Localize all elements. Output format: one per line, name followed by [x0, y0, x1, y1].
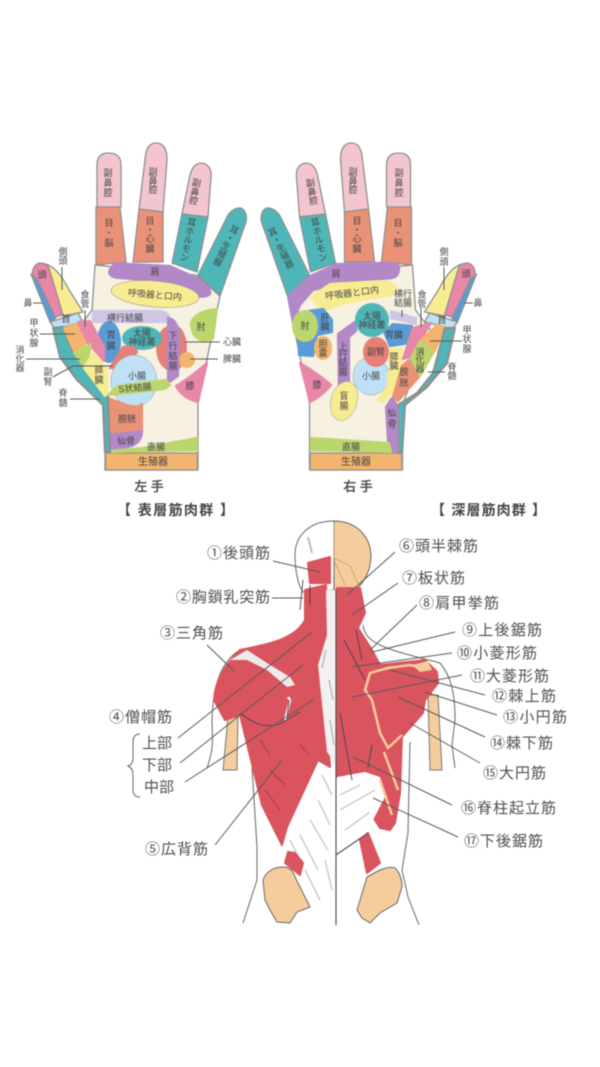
right hand labels: 心 [352, 233, 362, 244]
right hand labels: ・ [271, 234, 283, 247]
right hand labels: モ [315, 243, 326, 255]
right hand labels: 骨 [387, 419, 397, 429]
left hand labels: 神経叢 [128, 336, 156, 347]
left hand labels: 小腸 [128, 371, 146, 381]
left hand labels: 鼻 [190, 185, 200, 198]
right hand labels: 状 [462, 333, 472, 344]
left hand labels: 腺 [29, 337, 39, 348]
left hand labels: 生殖器 [138, 455, 168, 468]
right hand labels: 首 [437, 314, 447, 325]
right hand labels: 脳 [393, 237, 403, 248]
right hand labels: 生殖器 [341, 455, 371, 468]
left hand labels: 甲 [29, 318, 39, 328]
muscle labels: ⑫棘上筋 [492, 688, 556, 705]
trapezius brace [128, 734, 140, 797]
right hand labels: 右 手 [343, 479, 373, 494]
right hand labels: 脊 [447, 361, 457, 372]
right hand labels: 髄 [447, 370, 457, 381]
right hand labels: 頭 [461, 269, 471, 279]
right hand labels: 臓 [389, 361, 399, 371]
left hand labels: 目 [104, 218, 114, 228]
right hand labels: 盲 [339, 391, 349, 401]
right hand labels: 化 [415, 355, 425, 365]
heading: deep muscles: 【 深層筋肉群 】 [431, 502, 546, 518]
right hand labels: ・ [352, 225, 362, 235]
muscle leader lines [178, 552, 497, 845]
left hand labels: ン [179, 252, 190, 263]
right hand labels: 目 [393, 218, 403, 228]
left hand labels: 頭 [37, 270, 47, 280]
left hand labels: 腔 [148, 185, 158, 195]
left hand labels: 鼻 [148, 175, 158, 186]
left hand labels: 臓 [106, 341, 116, 351]
muscle labels: ④僧帽筋 [109, 709, 172, 726]
right hand labels: 目 [352, 216, 362, 226]
left hand labels: モ [181, 243, 192, 255]
muscle labels: ⑬小円筋 [503, 709, 567, 726]
left hand labels: 肩 [150, 267, 160, 277]
muscle labels: ⑭棘下筋 [490, 735, 553, 752]
right hand labels: 腔 [348, 185, 358, 195]
torso outline [243, 742, 419, 925]
back muscle anatomy illustration [207, 521, 455, 925]
left hand labels: 鼻 [103, 177, 113, 188]
left hand labels: 首 [61, 313, 71, 324]
deep muscles: right side [337, 588, 438, 923]
right hand labels: 胱 [399, 378, 409, 388]
left hand labels [15, 167, 241, 494]
right hand labels: 耳 [310, 217, 321, 228]
right hand labels: 直腸 [342, 441, 360, 452]
left hand labels: 器 [15, 363, 25, 373]
left hand labels: 呼吸器と口内 [128, 287, 182, 302]
right hand labels: 腺 [462, 343, 472, 354]
left hand labels: 肘 [196, 322, 206, 332]
left hand labels: ホ [184, 225, 195, 237]
right hand labels: 器 [415, 364, 425, 374]
right hand labels: 太陽 [363, 310, 381, 321]
muscle labels [109, 538, 567, 858]
right hand labels: 殖 [278, 249, 291, 263]
right hand labels: 鼻 [473, 297, 483, 308]
right hand labels: 横行 [394, 288, 412, 299]
right hand labels [267, 167, 483, 494]
left hand labels: 脾臓 [223, 353, 241, 364]
right hand labels: 腸 [338, 367, 348, 377]
left hand labels: 膀胱 [118, 414, 136, 424]
heading: superficial muscles: 【 表層筋肉群 】 [117, 502, 234, 518]
right hand labels: 側 [439, 246, 449, 257]
muscle labels: ②胸鎖乳突筋 [176, 589, 270, 606]
left hand labels: 食 [80, 290, 90, 300]
left hand labels: 下 [168, 331, 178, 341]
muscle labels: ⑪大菱形筋 [470, 668, 549, 685]
left hand labels: 耳 [228, 224, 240, 237]
muscle labels: ⑰下後鋸筋 [464, 833, 543, 850]
left hand labels: 鼻 [23, 297, 33, 308]
right hand labels: ン [317, 252, 328, 263]
muscle labels: ①後頭筋 [207, 545, 270, 562]
left hand leader lines [26, 267, 220, 399]
left hand labels: 心臓 [223, 336, 241, 347]
right hand labels: 甲 [462, 325, 472, 335]
right hand labels: 結腸 [394, 297, 412, 308]
muscle labels: ⑧肩甲挙筋 [419, 595, 499, 612]
left hand labels: 腔 [103, 188, 113, 198]
right hand labels: 膵 [389, 351, 399, 362]
right hand labels: 副 [348, 167, 358, 177]
left hand labels: 状 [29, 327, 39, 338]
right hand labels: 器 [283, 258, 296, 271]
left hand labels: 目 [145, 216, 155, 226]
right hand labels: ホ [312, 225, 323, 237]
left hand labels: 左 手 [134, 479, 164, 494]
left hand labels: 直腸 [147, 441, 165, 452]
left hand labels: ・ [145, 225, 155, 235]
right hand labels: 腔 [308, 195, 319, 207]
left hand labels: 髄 [58, 397, 68, 408]
right hand labels: 呼吸器と口内 [325, 284, 380, 301]
right hand labels: 肘 [300, 321, 310, 331]
head and skull [295, 521, 371, 592]
right hand labels: 胆 [318, 339, 328, 349]
right hand labels: 腔 [394, 188, 404, 198]
right hand labels: 鼻 [348, 175, 358, 186]
left hand labels: 膵 [94, 364, 104, 375]
left hand labels: 殖 [216, 247, 229, 261]
left hand labels: 心 [145, 233, 155, 244]
right hand labels: 生 [274, 241, 287, 255]
right hand base shapes [261, 143, 476, 470]
muscle labels: 下部 [142, 757, 172, 774]
right hand reflexology chart [261, 143, 483, 494]
left hand labels: 臓 [94, 375, 104, 385]
right hand labels: 鼻 [394, 177, 404, 188]
left hand labels: 副 [43, 367, 53, 377]
muscle labels: ⑦板状筋 [402, 570, 465, 587]
right hand labels: 嚢 [318, 347, 328, 358]
left hand labels: 太陽 [133, 327, 151, 338]
right hand labels: 鼻 [307, 185, 317, 198]
left hand labels: 耳 [186, 217, 197, 228]
right hand labels: 神経叢 [358, 319, 386, 330]
left hand labels: 化 [15, 354, 25, 364]
right hand organ zones [288, 263, 455, 453]
right hand labels: ・ [393, 228, 403, 238]
left hand labels: 臓 [145, 244, 155, 254]
left hand labels: 行 [168, 340, 178, 351]
right hand labels: 副 [305, 177, 316, 189]
left hand labels: 結 [168, 350, 178, 361]
left hand base shapes [31, 143, 246, 470]
right hand labels: 仙 [387, 407, 397, 418]
left hand labels: 管 [80, 298, 90, 309]
right hand labels: 頭 [439, 257, 449, 267]
muscle labels: ⑩小菱形筋 [457, 645, 537, 662]
right hand labels: 消 [415, 346, 425, 357]
lower back white tissue [287, 760, 336, 915]
left hand labels: 副 [191, 177, 202, 189]
muscle labels: 上部 [142, 735, 172, 752]
muscle labels: ⑮大円筋 [483, 765, 546, 782]
right hand labels: 小腸 [362, 371, 380, 381]
left hand labels: ル [183, 234, 193, 246]
center spine line [336, 590, 368, 925]
left hand labels: 副 [103, 168, 113, 178]
right hand labels: ル [314, 234, 324, 246]
superficial muscles: left side [214, 557, 336, 923]
muscle labels: ③三角筋 [160, 625, 223, 642]
right hand labels: 副 [394, 168, 404, 178]
left hand reflexology chart [15, 143, 246, 494]
right hand labels: 耳 [267, 226, 279, 239]
left hand labels: 器 [211, 256, 224, 269]
left hand labels: 仙骨 [117, 435, 135, 446]
right hand labels: 結 [338, 357, 348, 368]
left hand labels: ・ [104, 228, 114, 238]
right hand labels: 管 [417, 298, 427, 309]
right hand labels: 臓 [320, 322, 330, 332]
left hand labels: 副 [148, 167, 158, 177]
arms [207, 625, 455, 770]
right hand labels: 上 [338, 342, 348, 352]
right hand labels: 腸 [339, 401, 349, 411]
right hand labels: 肩 [331, 269, 341, 279]
muscle labels: ⑥頭半棘筋 [399, 538, 478, 555]
left hand labels: 膝 [185, 380, 195, 391]
right hand labels: 肝 [320, 313, 330, 323]
muscle labels: ⑨上後鋸筋 [462, 622, 542, 639]
right hand labels: 膀 [399, 367, 409, 377]
left hand organ zones [53, 263, 217, 452]
left hand labels: 横行結腸 [107, 312, 143, 323]
muscle labels: 中部 [144, 779, 174, 796]
left hand labels: 脳 [104, 237, 114, 248]
left hand labels: 消 [15, 344, 25, 355]
right hand labels: 行 [338, 349, 348, 360]
left hand labels: 胃 [106, 330, 116, 340]
right hand labels: 副腎 [367, 347, 385, 357]
left hand labels: 側 [58, 246, 68, 257]
left hand labels: ・ [224, 232, 236, 245]
left hand labels: 頭 [58, 256, 68, 266]
left hand labels: 腔 [188, 195, 199, 207]
muscle labels: ⑤広背筋 [145, 841, 208, 858]
left hand labels: 脊 [58, 387, 68, 398]
left hand labels: 生 [220, 239, 233, 253]
right hand leader lines [402, 267, 473, 372]
muscle labels: ⑯脊柱起立筋 [461, 800, 556, 817]
right hand labels: 食 [417, 290, 427, 300]
right hand labels: 胃臓 [385, 330, 403, 340]
right hand labels: 臓 [352, 244, 362, 254]
right hand labels: 膝 [312, 379, 322, 390]
left hand labels: 腸 [168, 361, 178, 371]
left hand labels: S状結腸 [118, 381, 152, 394]
left hand labels: 腎 [43, 377, 53, 387]
